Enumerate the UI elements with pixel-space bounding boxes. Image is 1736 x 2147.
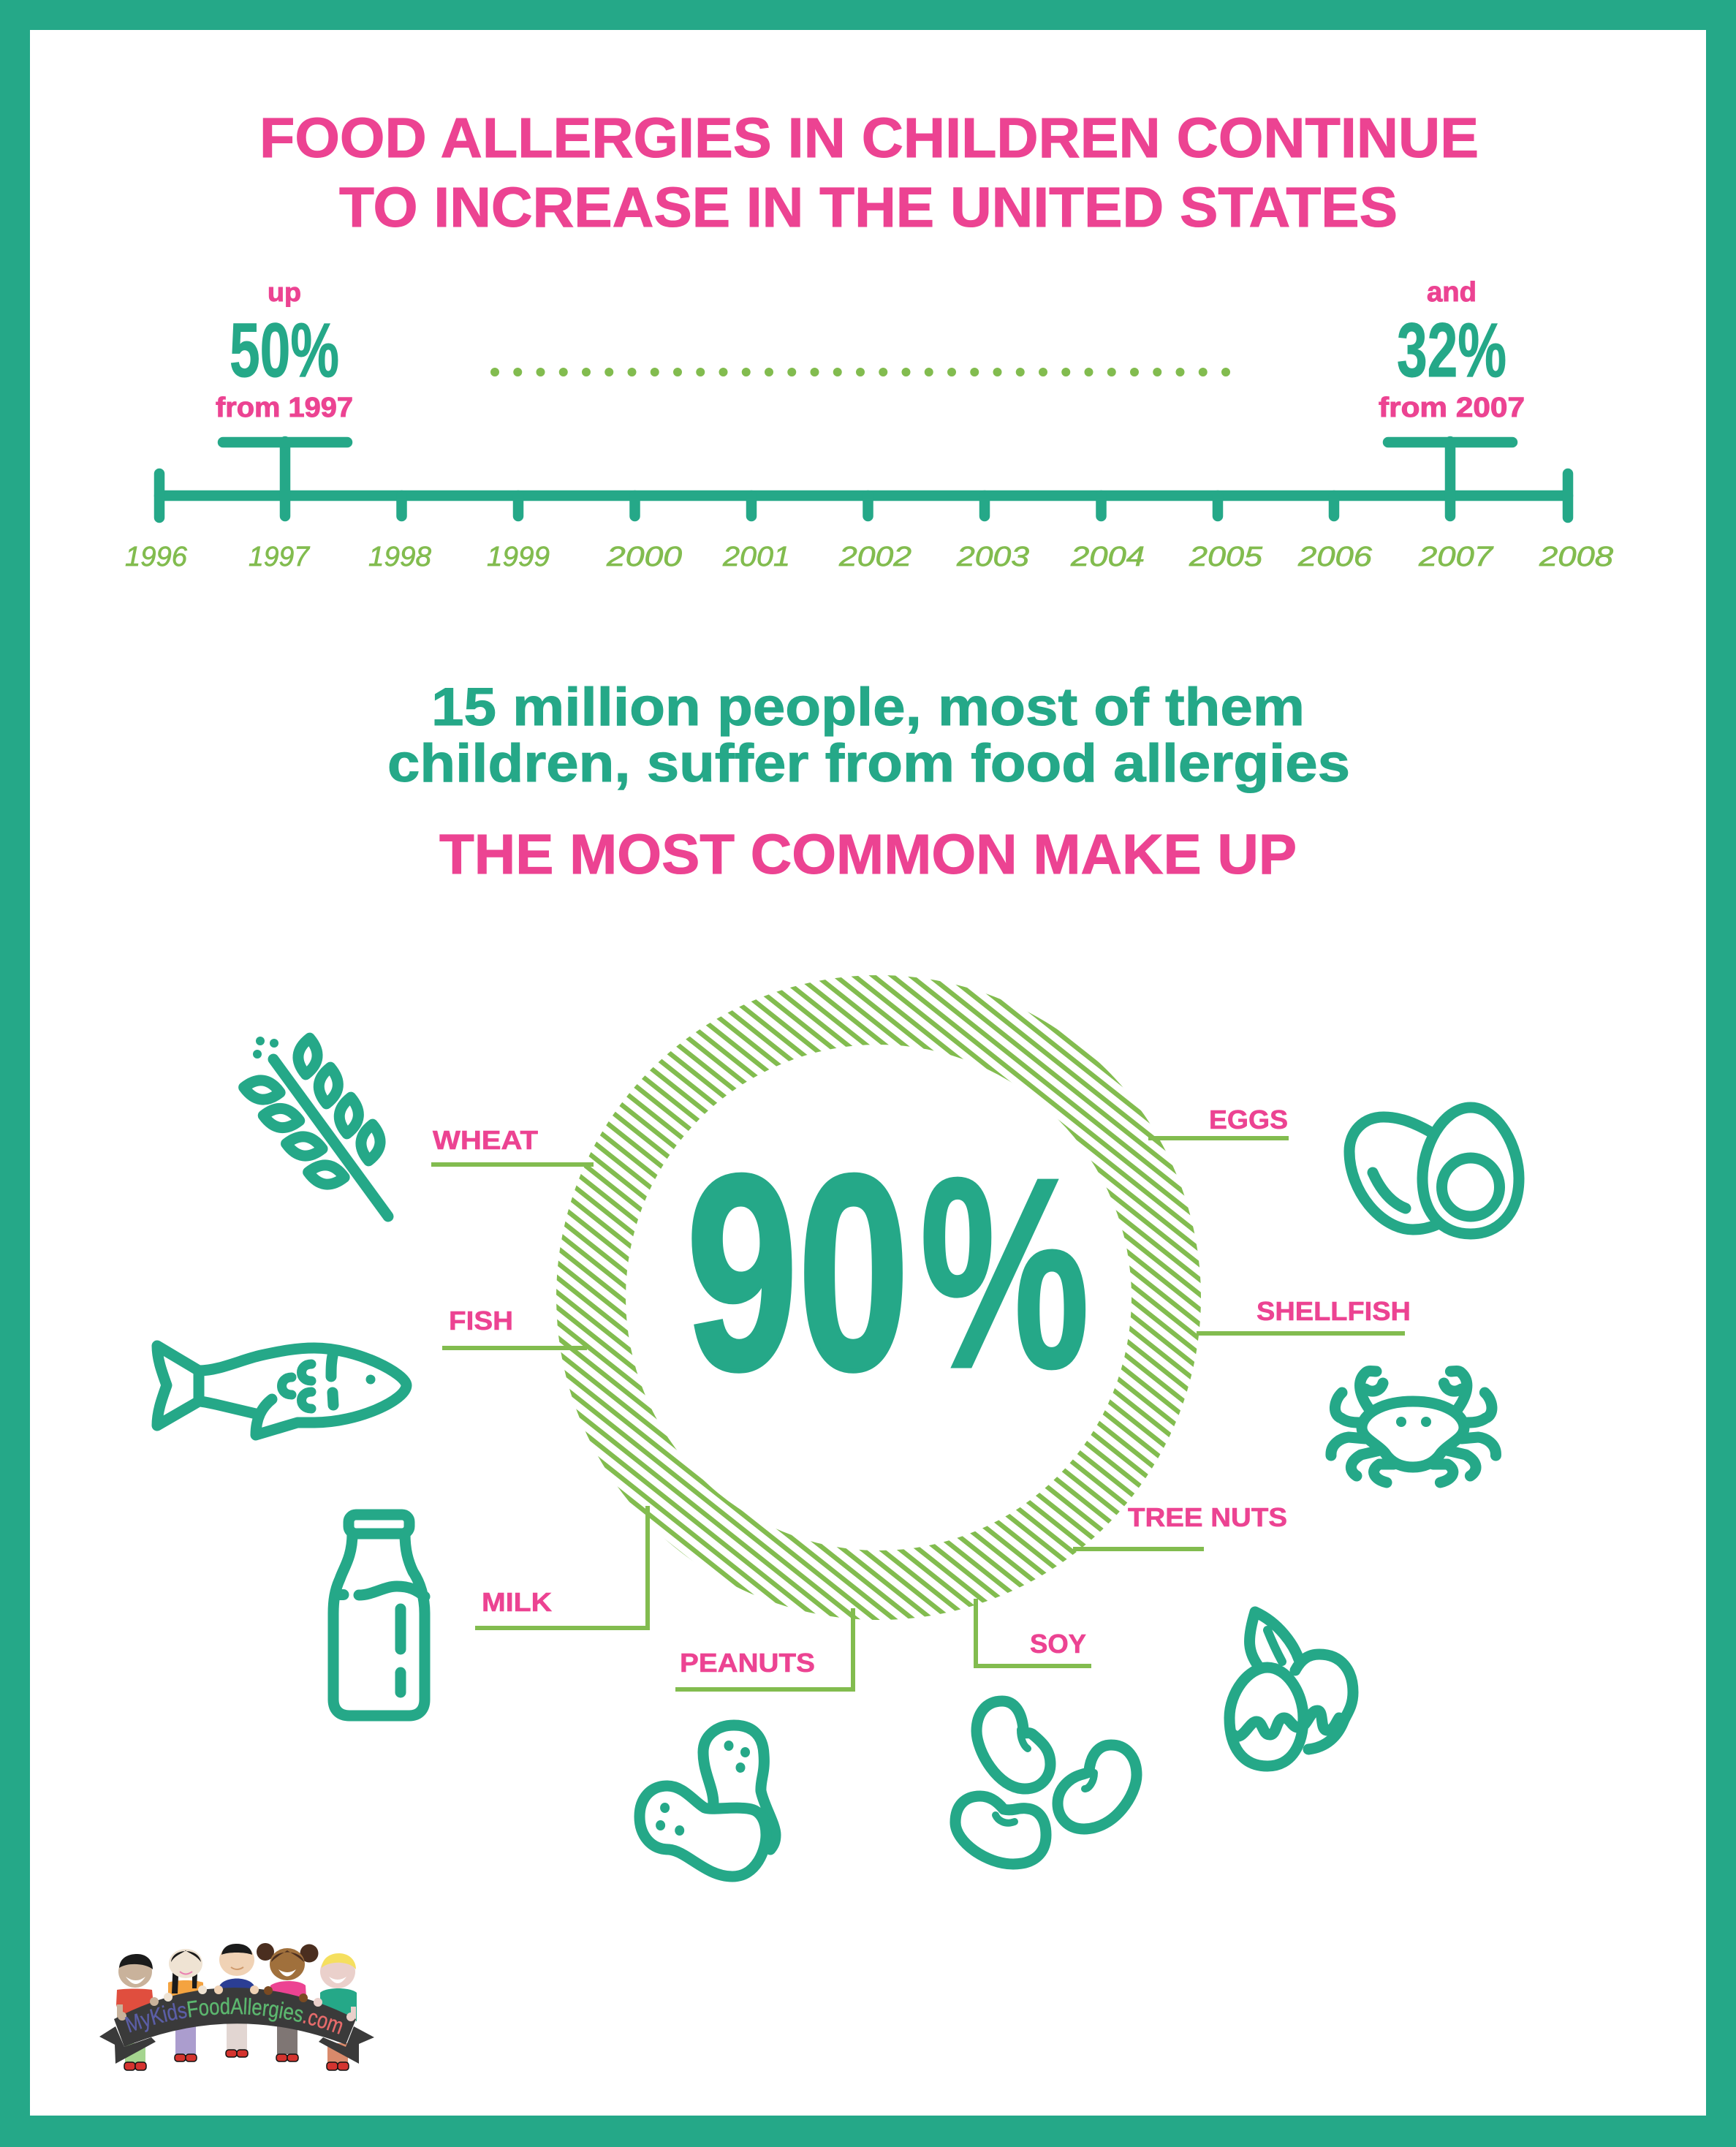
label: fish: FISH	[449, 1306, 513, 1336]
stat: and 32% from 2007: and	[1427, 277, 1477, 308]
kid 3	[219, 1944, 255, 2057]
timeline year labels: 1997	[249, 542, 311, 572]
stat: up 50% from 1997	[216, 277, 353, 423]
timeline year labels: 2008	[1539, 542, 1613, 572]
banner	[99, 1988, 374, 2064]
label: peanuts: PEANUTS	[680, 1648, 815, 1678]
timeline year labels	[125, 542, 1613, 572]
icon: crab	[1331, 1371, 1496, 1483]
big number 90%: 90	[686, 1117, 909, 1428]
icon: peanuts	[640, 1725, 776, 1877]
timeline year labels: 2003	[956, 542, 1029, 572]
kid 2	[168, 1949, 203, 2061]
kid 4	[257, 1943, 319, 2061]
hatched ring	[556, 975, 1201, 1620]
label: peanuts	[675, 1608, 853, 1689]
label: soy	[976, 1599, 1091, 1666]
timeline year labels: 2007	[1418, 542, 1494, 572]
icon: wheat	[243, 1037, 388, 1216]
title	[259, 107, 1479, 239]
hands	[118, 1985, 355, 2021]
timeline year labels: 1999	[487, 542, 550, 572]
label: milk: MILK	[482, 1587, 552, 1617]
subheading	[387, 678, 1350, 793]
icon: soy beans	[955, 1701, 1137, 1864]
big number 90%: %	[920, 1121, 1090, 1425]
icon: eggs	[1349, 1107, 1519, 1234]
label: soy: SOY	[1030, 1629, 1086, 1659]
stat: up 50% from 1997: up	[268, 277, 301, 307]
timeline year labels: 2001	[722, 542, 790, 572]
subheading: 15 million people, most of them	[431, 678, 1305, 737]
dotted line	[495, 368, 1229, 376]
heading: the most common make up: THE MOST COMMON MAKE UP	[439, 823, 1297, 886]
title: FOOD ALLERGIES IN CHILDREN CONTINUE	[259, 107, 1479, 170]
timeline axis	[159, 442, 1568, 518]
banner text: MyKidsFoodAllergies.com	[124, 1997, 342, 2034]
icon: milk bottle	[333, 1515, 425, 1716]
subheading: children, suffer from food allergies	[387, 734, 1350, 793]
timeline year labels: 2002	[838, 542, 911, 572]
kid 1	[116, 1954, 153, 2070]
label: wheat: WHEAT	[433, 1125, 538, 1155]
logo: MyKidsFoodAllergies.com kids with banner	[99, 1943, 374, 2071]
timeline year labels: 2004	[1070, 542, 1145, 572]
label: eggs: EGGS	[1209, 1105, 1288, 1135]
timeline year labels: 2005	[1189, 542, 1263, 572]
label: tree nuts: TREE NUTS	[1128, 1502, 1287, 1532]
stat: up 50% from 1997: from 1997	[216, 393, 353, 423]
icon: fish	[157, 1346, 406, 1435]
stat: and 32% from 2007: from 2007	[1379, 393, 1525, 423]
timeline year labels: 1996	[125, 542, 188, 572]
timeline year labels: 2006	[1297, 542, 1373, 572]
label: milk	[475, 1506, 648, 1628]
title: TO INCREASE IN THE UNITED STATES	[339, 176, 1398, 239]
icon: tree nuts	[1229, 1612, 1353, 1766]
timeline year labels: 1998	[368, 542, 431, 572]
timeline year labels: 2000	[606, 542, 682, 572]
label: shellfish: SHELLFISH	[1256, 1296, 1411, 1326]
stat: and 32% from 2007	[1379, 277, 1525, 423]
stat: and 32% from 2007: 32%	[1397, 308, 1506, 393]
stat: up 50% from 1997: 50%	[230, 308, 339, 393]
kid 5	[320, 1953, 357, 2070]
